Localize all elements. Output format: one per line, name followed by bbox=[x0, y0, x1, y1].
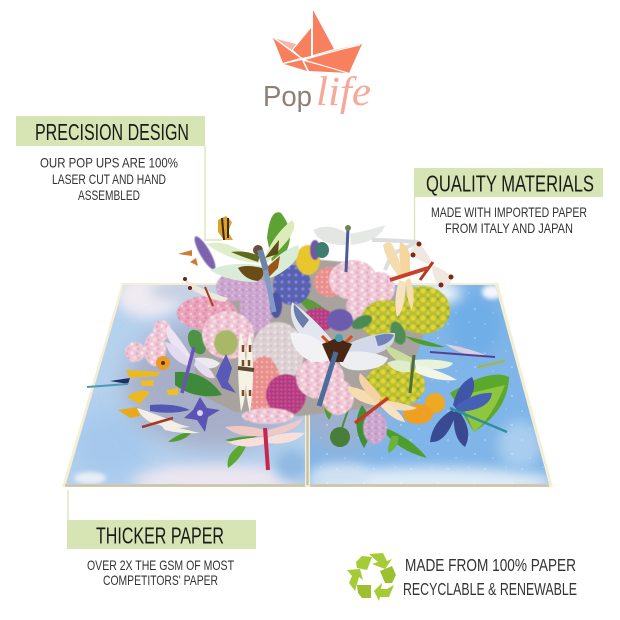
connector line bbox=[414, 197, 416, 243]
dragonfly: white left with red body bbox=[137, 408, 200, 433]
bee insects bbox=[178, 216, 233, 266]
dragonfly: pink-red bottom bbox=[225, 418, 305, 470]
description: COMPETITORS' PAPER bbox=[103, 572, 218, 588]
dragonfly: lilac left bbox=[165, 325, 220, 393]
yellow daisies bbox=[118, 356, 445, 424]
leaves bbox=[168, 212, 509, 468]
connector line bbox=[67, 490, 69, 520]
description bbox=[87, 557, 234, 588]
wordmark life: life bbox=[316, 68, 371, 114]
dragonfly: orange bbox=[383, 242, 428, 317]
label: quality materials bbox=[414, 168, 603, 243]
description bbox=[431, 204, 587, 236]
description bbox=[40, 154, 178, 203]
description: LASER CUT AND HAND bbox=[52, 171, 166, 187]
card border bbox=[62, 283, 553, 487]
damselfly: small blue far left bbox=[87, 378, 130, 387]
heading bar bbox=[414, 168, 603, 197]
dragonfly: olive top bbox=[206, 220, 299, 312]
recycled paper statement bbox=[403, 555, 577, 599]
heading bar bbox=[16, 116, 205, 146]
dragonfly: blue bbox=[430, 377, 507, 447]
bouquet mass bbox=[195, 258, 425, 416]
wordmark Pop: Pop bbox=[263, 81, 312, 113]
label: precision design bbox=[16, 116, 222, 240]
pop-up bouquet bbox=[87, 212, 509, 470]
dragonfly: orange lower bbox=[347, 373, 417, 423]
description: OUR POP UPS ARE 100% bbox=[40, 154, 178, 170]
dragonfly: large central blue-white bbox=[290, 302, 395, 406]
dragonfly: cream top-left bbox=[183, 277, 228, 306]
right panel bbox=[310, 285, 549, 484]
connector line bbox=[205, 146, 222, 240]
description: OVER 2X THE GSM OF MOST bbox=[87, 557, 234, 573]
heading bar bbox=[67, 520, 256, 549]
pop-up card base bbox=[60, 274, 555, 497]
description: FROM ITALY AND JAPAN bbox=[445, 220, 573, 236]
dragonfly: grey top bbox=[313, 225, 418, 272]
icon: origami paper boat bbox=[273, 10, 362, 73]
flower clusters bbox=[125, 234, 450, 444]
seed pod bbox=[330, 427, 350, 447]
icon: recycle arrows bbox=[347, 553, 396, 601]
label: thicker paper bbox=[67, 490, 256, 588]
dragonfly: white standing spotted bbox=[238, 332, 254, 413]
card bottom edge and fold bbox=[65, 390, 549, 486]
dragonfly: green bbox=[385, 345, 457, 393]
blue and purple star flowers bbox=[150, 354, 236, 432]
damselfly: purple right bbox=[430, 344, 505, 367]
dragonfly: white with red tips bbox=[410, 242, 454, 288]
heading: THICKER PAPER bbox=[96, 522, 224, 548]
logo: Poplife bbox=[263, 10, 371, 114]
heading: PRECISION DESIGN bbox=[35, 119, 189, 145]
recycled paper statement: MADE FROM 100% PAPER bbox=[405, 555, 576, 575]
description: ASSEMBLED bbox=[78, 187, 140, 203]
left panel bbox=[66, 285, 305, 484]
